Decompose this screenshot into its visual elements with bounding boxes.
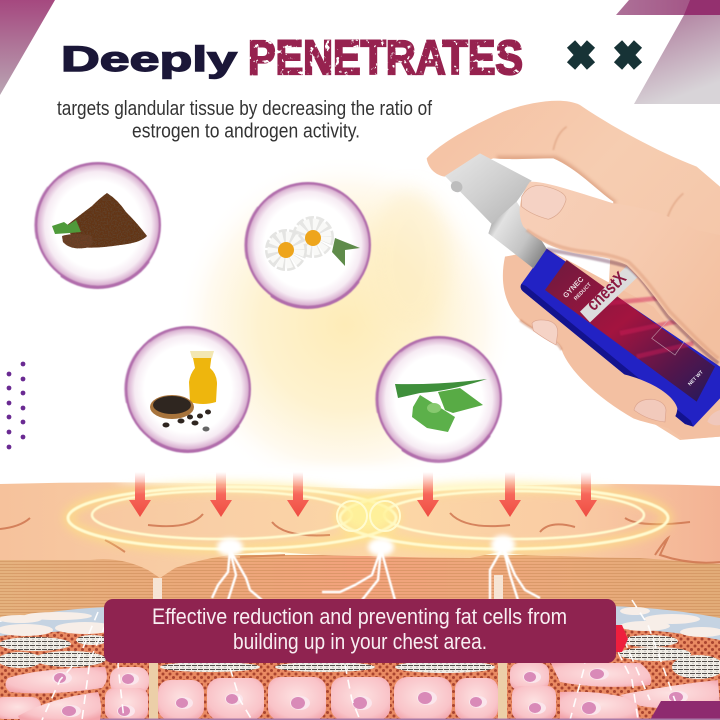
ingredient bubble: chamomile (246, 183, 370, 307)
ingredient bubble: aloe vera (377, 337, 501, 461)
spray cap (445, 153, 532, 224)
thumb underside shading (527, 230, 718, 358)
knuckle creases (553, 127, 683, 220)
pink cells (0, 663, 720, 720)
speckled fat patches (0, 635, 720, 679)
white dashed lines (42, 600, 682, 720)
corner shape: top right large (634, 0, 720, 104)
red x behind banner (612, 625, 628, 652)
lower finger shadow (520, 320, 562, 350)
spray collar (488, 202, 547, 268)
bubble rim (377, 337, 501, 461)
tan vertical fibres (149, 663, 158, 720)
hand holding spray bottle (427, 101, 720, 440)
nozzle hole (449, 179, 465, 194)
nail: lower finger (634, 399, 666, 422)
cell nuclei halos (52, 668, 688, 717)
glow rings (68, 487, 668, 549)
yellow glow behind ingredients (175, 155, 515, 495)
banner callout (104, 599, 616, 663)
lower fingers (503, 249, 720, 439)
cell nuclei (54, 669, 683, 716)
glow rings soft halo (68, 487, 668, 549)
nail: small right finger (707, 410, 720, 425)
banner callout: building up in your chest area. (233, 629, 487, 654)
icon: two x marks (571, 44, 638, 66)
skin creases (0, 513, 720, 563)
title word: Deeply: Deeply (61, 40, 238, 79)
banner callout: Effective reduction and preventing fat cells from (152, 604, 567, 629)
corner shape: top right small (616, 0, 720, 15)
skin cross-section illustration (0, 467, 720, 720)
title word: PENETRATES: PENETRATES (248, 32, 523, 85)
lower finger with nail (617, 373, 677, 423)
glow near nozzle (370, 190, 450, 330)
tissue layer (0, 628, 720, 720)
bottle: chestX (583, 268, 630, 315)
bubble rim (126, 327, 250, 451)
bottle (521, 249, 720, 427)
label streaks (607, 297, 693, 357)
nail: middle finger (532, 320, 558, 345)
bottom edge line (100, 718, 720, 720)
subtitle text (57, 97, 432, 142)
thumb nail (522, 185, 566, 219)
bubble rim (36, 163, 160, 287)
muscle layer (0, 555, 720, 620)
ingredient bubble: castor oil (126, 327, 250, 451)
centre glow rings (337, 501, 400, 531)
subtitle text: targets glandular tissue by decreasing the ratio of (57, 97, 432, 120)
sparks (217, 535, 515, 556)
bubble rim (246, 183, 370, 307)
white fat cells (0, 607, 720, 637)
centre glow (342, 498, 394, 532)
bottle: GYNEC (561, 274, 586, 300)
tan fibre under skin (153, 578, 162, 600)
subtitle text: estrogen to androgen activity. (132, 120, 360, 142)
lightning bolts (212, 547, 540, 600)
ingredient bubble: coffee powder (36, 163, 160, 287)
corner shape: top left (0, 0, 55, 95)
index finger shading (497, 158, 615, 203)
top fade of skin (115, 467, 615, 489)
thumb shadow on bottle (547, 249, 718, 363)
corner overlap (684, 0, 720, 15)
hand back: index finger and palm (427, 101, 720, 440)
fat cell band left (0, 607, 110, 642)
thumb and palm front (520, 182, 720, 362)
title (61, 32, 523, 85)
arrows pointing down (129, 472, 597, 517)
epidermis layer (0, 482, 720, 578)
bottle: NET WT (687, 369, 705, 387)
bottle: REDUCT (573, 281, 593, 302)
corner shape: bottom right (650, 701, 720, 720)
fat cell band right (610, 606, 720, 640)
dotted decoration (7, 362, 25, 449)
